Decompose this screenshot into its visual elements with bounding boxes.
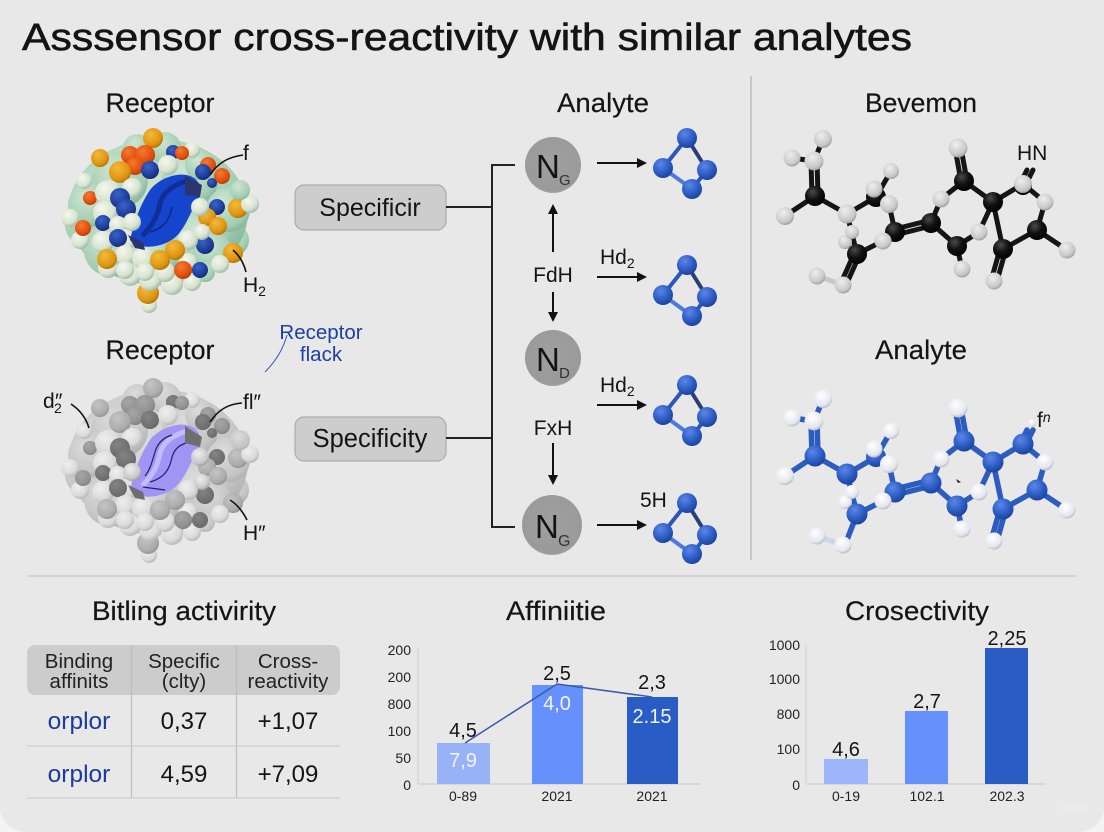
table row 2: +7,09: [258, 761, 318, 788]
chart: affinity: [388, 642, 700, 804]
chart: affinity: 2021: [636, 788, 668, 804]
chart: affinity: 100: [388, 723, 411, 739]
chart: crosectivity: 100: [777, 741, 800, 757]
label: d2: d: [43, 390, 55, 413]
heading: bevemon: Bevemon: [865, 88, 977, 118]
callout: receptor flack: flack: [300, 343, 343, 366]
node: N G top: G: [559, 172, 571, 189]
chart: affinity: 2.15: [633, 706, 671, 728]
label: H double prime: H″: [243, 522, 266, 545]
heading: affiniitie: Affiniitie: [506, 596, 606, 626]
chart: affinity: 0: [403, 777, 411, 793]
heading: bitling activirity: Bitling activirity: [92, 596, 277, 626]
analyte small molecules: [653, 128, 717, 564]
node: N D: [525, 330, 581, 386]
arrows: [548, 158, 647, 530]
chart: affinity: 7,9: [449, 750, 477, 772]
chart: crosectivity: 1000: [769, 671, 800, 687]
label: HN: HN: [1017, 142, 1047, 165]
label: d2: [43, 390, 89, 428]
label: f n: n: [1043, 409, 1051, 425]
chart: crosectivity: 102.1: [909, 788, 945, 804]
title: Asssensor cross-reactivity with similar analytes: [22, 17, 912, 59]
chart: affinity: 2,3: [638, 672, 666, 694]
label: 5H: 5H: [640, 489, 667, 512]
label: H2: 2: [258, 283, 266, 299]
table header: Cross-: [258, 650, 318, 673]
label: H2: [233, 250, 266, 299]
heading: crosectivity: Crosectivity: [845, 596, 990, 626]
table header: Specific: [148, 650, 220, 673]
chart: affinity: 200: [388, 642, 411, 658]
callout: receptor flack: [265, 321, 363, 372]
table header: reactivity: [248, 670, 329, 693]
chart: crosectivity: 202.3: [989, 788, 1025, 804]
molecule: black: [776, 130, 1076, 294]
label: fl: [210, 391, 262, 422]
chart: crosectivity: 2,7: [913, 691, 941, 713]
chart: crosectivity: 800: [777, 706, 800, 722]
label: d2: ″: [55, 390, 63, 413]
label: Hd2 upper: Hd: [600, 246, 627, 269]
label: FdH: FdH: [533, 264, 573, 287]
table row 2: orplor: [48, 761, 110, 788]
table row 2: [48, 761, 318, 788]
chart: crosectivity: 0: [792, 777, 800, 793]
chart: affinity: 4,0: [543, 693, 571, 715]
label: fl: fl″: [243, 391, 262, 414]
heading: receptor lower: Receptor: [106, 335, 215, 365]
label: Hd2 lower: Hd: [600, 374, 627, 397]
chart: affinity: 2,5: [543, 663, 571, 685]
chart: affinity: 800: [388, 696, 411, 712]
node: N D: D: [559, 365, 570, 382]
chart: crosectivity: 1000: [769, 637, 800, 653]
label: f: f: [243, 142, 249, 165]
pill: specificir: Specificir: [319, 194, 421, 222]
bracket connector: [446, 165, 515, 527]
table header: Binding: [45, 650, 113, 673]
colored receptor protein: [61, 128, 259, 313]
chart: affinity: 50: [395, 750, 411, 766]
table header: (clty): [162, 670, 206, 693]
grey receptor protein: [61, 378, 259, 563]
chart: crosectivity: 2,25: [988, 628, 1026, 650]
binding table: [27, 645, 340, 798]
heading: analyte: Analyte: [557, 88, 649, 118]
label: f: [210, 142, 249, 175]
callout: receptor flack: Receptor: [279, 321, 363, 344]
label: f n: f: [1037, 409, 1043, 432]
node: N G bottom: N: [535, 508, 559, 545]
molecule: blue: [776, 390, 1076, 554]
node: N G bottom: G: [558, 533, 570, 550]
table row 1: +1,07: [258, 708, 318, 735]
label: d2: 2: [54, 400, 62, 416]
chart: affinity: 4,5: [449, 720, 477, 742]
table row 1: orplor: [48, 708, 110, 735]
watermark: Grok: [1056, 800, 1089, 817]
node: N G bottom: [522, 495, 582, 555]
chart: affinity: 0-89: [449, 788, 477, 804]
pill: specificity: Specificity: [313, 425, 428, 453]
table row 1: 0,37: [161, 708, 207, 735]
label: Hd2 upper: 2: [627, 255, 635, 271]
heading: receptor top: Receptor: [106, 88, 215, 118]
chart: affinity: 200: [388, 669, 411, 685]
node: N D: N: [536, 341, 560, 378]
pill: specificir: [295, 185, 446, 230]
node: N G top: [525, 137, 581, 193]
heading: analyte lower: Analyte: [875, 335, 967, 365]
chart: affinity: 2021: [541, 788, 573, 804]
table header: [27, 645, 340, 695]
table header: affinits: [50, 670, 108, 693]
table row 1: [48, 708, 318, 735]
label: Hd2 lower: 2: [627, 383, 635, 399]
label: FxH: FxH: [534, 417, 572, 440]
label: H double prime: [230, 500, 266, 545]
pill: specificity: [295, 417, 446, 461]
node: N G top: N: [536, 148, 560, 185]
chart: crosectivity: 0-19: [832, 788, 860, 804]
chart: crosectivity: [769, 628, 1046, 804]
label: H2: H: [243, 274, 258, 297]
table row 2: 4,59: [161, 761, 207, 788]
chart: crosectivity: 4,6: [832, 739, 860, 761]
